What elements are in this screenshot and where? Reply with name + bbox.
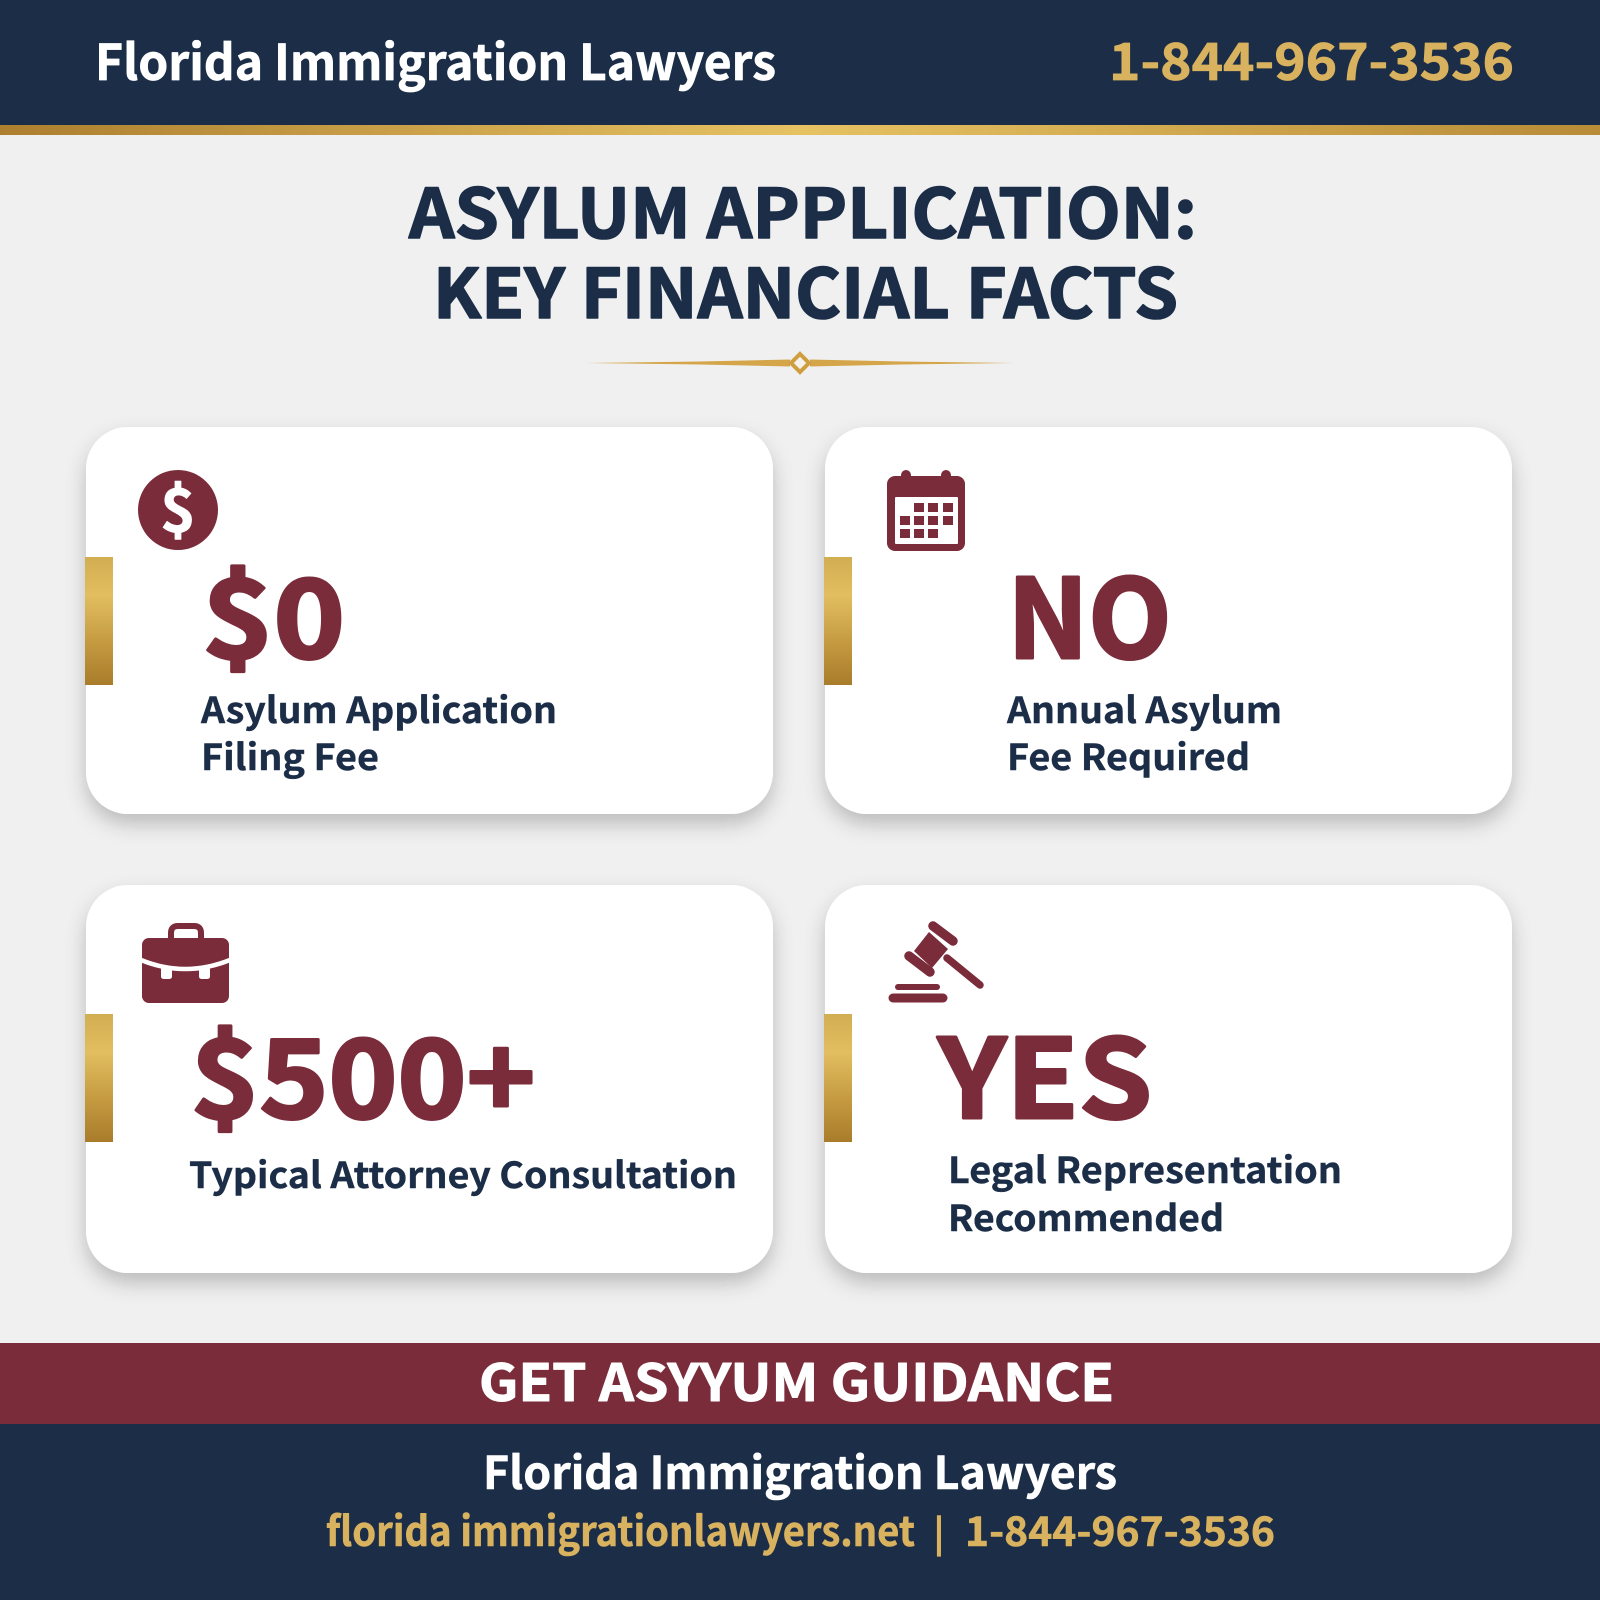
value: $500+: $500+ bbox=[190, 993, 536, 1150]
footer bbox=[0, 1424, 1600, 1600]
footer website and phone: | bbox=[934, 1505, 944, 1557]
title bbox=[408, 159, 1197, 338]
icon: calendar bbox=[887, 470, 965, 551]
header firm name: Florida Immigration Lawyers bbox=[95, 24, 776, 95]
label: legal representation bbox=[948, 1142, 1342, 1242]
value: NO: NO bbox=[1008, 533, 1172, 690]
label: annual fee bbox=[1006, 682, 1282, 781]
label: legal representation: Recommended bbox=[948, 1190, 1224, 1242]
value: YES: YES bbox=[937, 993, 1152, 1150]
value: $0: $0 bbox=[202, 533, 345, 690]
title: ASYLUM APPLICATION: bbox=[408, 159, 1197, 258]
label: annual fee: Annual Asylum bbox=[1006, 682, 1282, 734]
label: legal representation: Legal Representation bbox=[948, 1142, 1342, 1194]
label: filing fee: Filing Fee bbox=[201, 729, 379, 781]
title divider with diamond bbox=[586, 354, 1014, 372]
label: filing fee: Asylum Application bbox=[200, 682, 557, 734]
icon: briefcase bbox=[141, 926, 230, 1003]
icon: dollar coin bbox=[138, 463, 218, 550]
card: filing fee bbox=[85, 427, 773, 814]
icon: gavel bbox=[893, 926, 980, 998]
label: filing fee bbox=[200, 682, 557, 781]
label: annual fee: Fee Required bbox=[1007, 729, 1250, 781]
call to action banner bbox=[0, 1342, 1600, 1424]
card: annual fee bbox=[824, 427, 1512, 814]
header phone number: 1-844-967-3536 bbox=[1109, 21, 1514, 95]
call to action banner: GET ASYYUM GUIDANCE bbox=[479, 1342, 1114, 1416]
footer website and phone: 1-844-967-3536 bbox=[965, 1498, 1275, 1558]
icon: dollar coin: $ bbox=[160, 463, 196, 550]
header bar bbox=[0, 0, 1600, 135]
title: KEY FINANCIAL FACTS bbox=[433, 239, 1178, 338]
card: attorney consultation bbox=[85, 885, 773, 1273]
footer firm name: Florida Immigration Lawyers bbox=[483, 1437, 1117, 1502]
card: legal representation bbox=[824, 885, 1512, 1273]
footer website and phone: florida immigrationlawyers.net bbox=[326, 1498, 915, 1558]
label: attorney consultation: Typical Attorney Consultation bbox=[189, 1147, 737, 1199]
footer website and phone bbox=[326, 1498, 1275, 1558]
